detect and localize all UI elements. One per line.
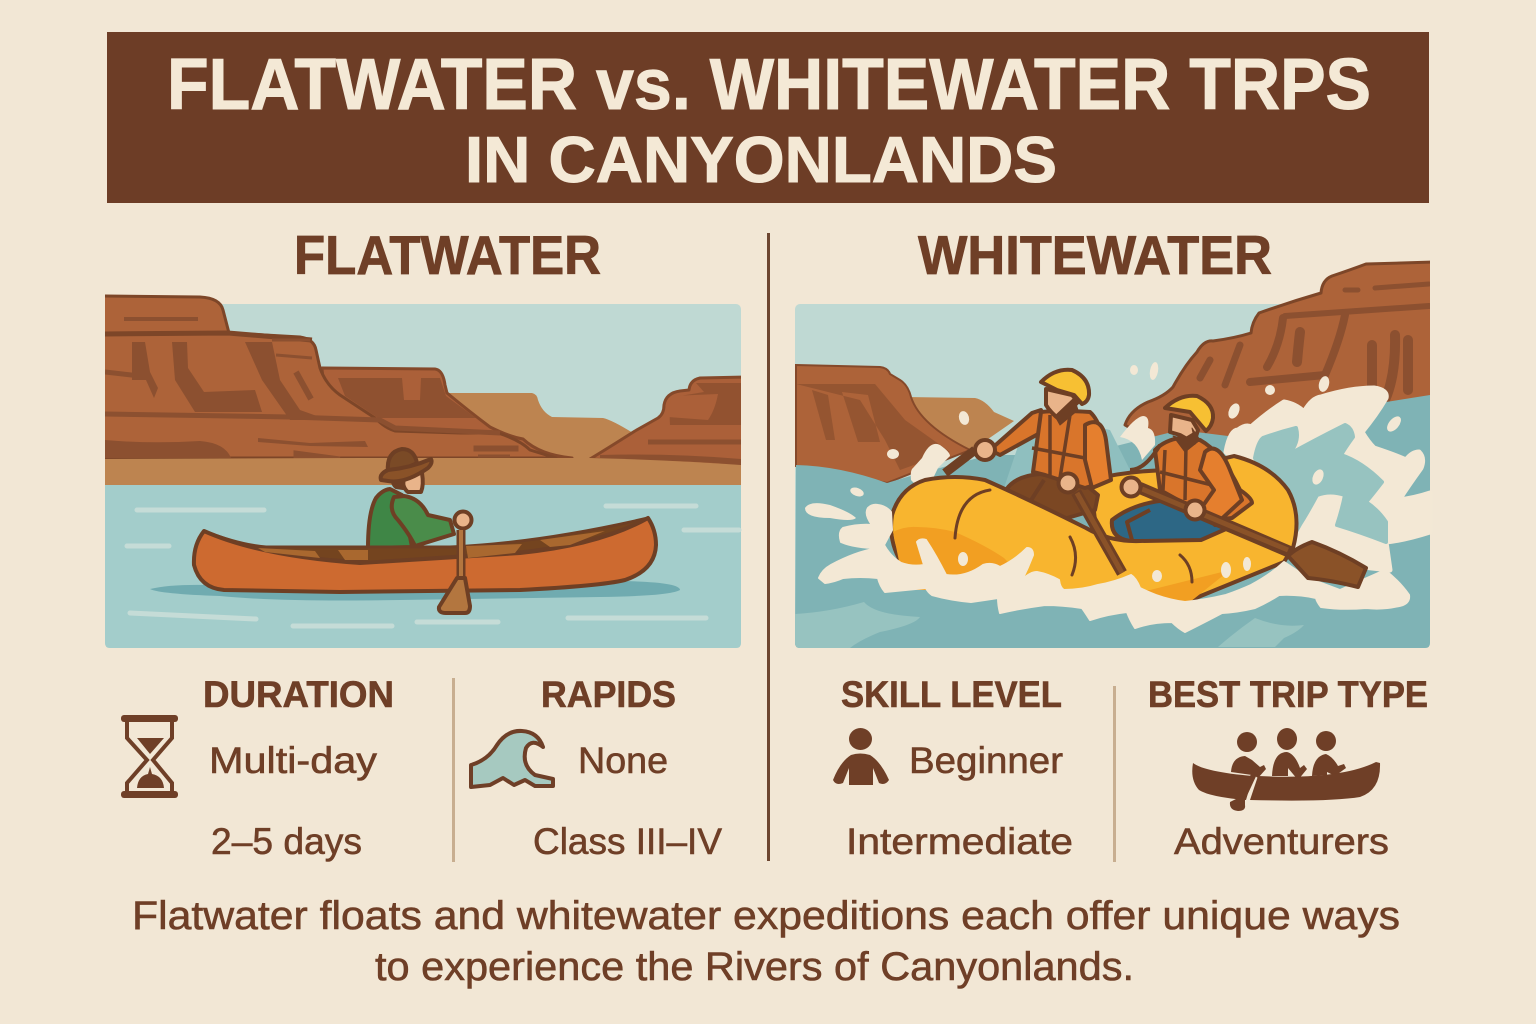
- middle mesa: [322, 368, 572, 458]
- small divider left: [452, 678, 455, 862]
- stat: rapids: RAPIDS: [541, 674, 676, 715]
- splash behind raft: [911, 388, 1430, 570]
- canoe shadow: [150, 581, 680, 600]
- title banner: [107, 32, 1429, 203]
- stat: rapids: Class III–IV: [533, 821, 722, 862]
- footer text: to experience the Rivers of Canyonlands.: [375, 945, 1134, 989]
- raft back tube: [1090, 456, 1297, 570]
- stat: rapids: None: [578, 740, 668, 781]
- centre divider: [767, 233, 770, 861]
- stat: best trip type: BEST TRIP TYPE: [1148, 674, 1428, 715]
- stat: skill level: Intermediate: [846, 821, 1073, 862]
- icon: person: [833, 728, 889, 785]
- stat: skill level: [833, 674, 1073, 862]
- panel: whitewater scene: [795, 262, 1435, 648]
- stat: skill level: SKILL LEVEL: [841, 674, 1062, 715]
- stat: duration: 2–5 days: [211, 821, 362, 862]
- stat: best trip type: [1148, 674, 1428, 862]
- heading: whitewater: WHITEWATER: [918, 224, 1272, 286]
- icon: hourglass: [121, 715, 178, 798]
- ripples: [127, 506, 739, 626]
- small divider right: [1113, 686, 1116, 862]
- raft front tube: [891, 477, 1290, 604]
- large cliff: [100, 296, 556, 458]
- droplets: [805, 361, 1404, 520]
- footer text: Flatwater floats and whitewater expeditions each offer unique ways: [132, 894, 1400, 938]
- shore: [105, 458, 741, 485]
- right mesa: [590, 377, 745, 466]
- title banner: IN CANYONLANDS: [465, 123, 1057, 196]
- left cliff: [796, 365, 1014, 483]
- icon: wave: [471, 731, 553, 787]
- water: [105, 485, 741, 648]
- rafter 1: [945, 370, 1111, 520]
- stat: duration: [121, 674, 394, 862]
- water: [795, 395, 1430, 648]
- rafter 2: [1112, 396, 1252, 541]
- footer text: [132, 894, 1400, 989]
- stat: best trip type: Adventurers: [1174, 821, 1389, 862]
- paddle: [439, 530, 470, 613]
- paddle 1: [1058, 474, 1122, 573]
- stat: rapids: [471, 674, 722, 862]
- title banner: FLATWATER vs. WHITEWATER TRPS: [167, 45, 1371, 125]
- heading: flatwater: FLATWATER: [294, 224, 601, 286]
- right cliff: [1124, 260, 1430, 436]
- stat: duration: Multi-day: [209, 740, 378, 781]
- paddler: [368, 449, 472, 560]
- foam: [819, 505, 1409, 632]
- stat: duration: DURATION: [203, 674, 394, 715]
- stat: skill level: Beginner: [909, 740, 1063, 781]
- panel: flatwater scene: [100, 296, 745, 648]
- canoe: [194, 518, 656, 592]
- paddle 2: [1122, 478, 1366, 587]
- icon: canoe with three paddlers: [1192, 728, 1380, 811]
